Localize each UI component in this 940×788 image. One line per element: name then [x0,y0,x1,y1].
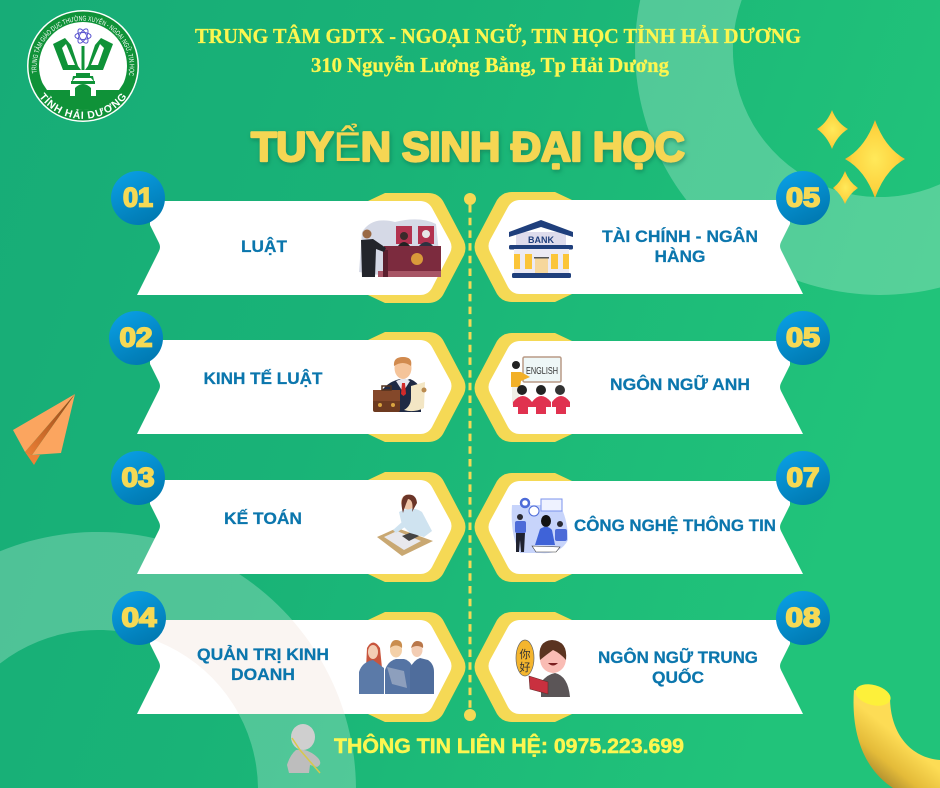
badge: 04 [112,591,166,645]
icon: bank [509,220,573,278]
label: NGÔN NGỮ TRUNG [598,647,758,667]
logo: TỈNH HẢI DƯƠNG [40,92,126,119]
badge: 08 [776,591,830,645]
panel: 08 Ngôn ngữ Trung Quốc [474,612,803,722]
label: CÔNG NGHỆ THÔNG TIN [574,516,776,535]
badge: 08: 08 [786,602,820,632]
icon: 3d yellow tube [853,681,940,788]
badge: 01: 01 [123,182,153,212]
icon: IT team [512,499,568,553]
decorative ring: bottom left [0,532,356,788]
label: KINH TẾ LUẬT [204,369,323,388]
panel: 05 Ngôn ngữ Anh [474,333,803,442]
badge: 04: 04 [122,602,157,632]
icon: chinese speaker [516,640,570,697]
badge: 05 second: 05 [786,322,820,352]
panel: 01 Luật [137,193,466,303]
icon: chinese speaker: 你 [520,646,530,662]
label: QUẢN TRỊ KINH [197,645,329,664]
panel: 02 Kinh tế luật [137,332,466,442]
label line 2: QUỐC [652,667,704,687]
icon: english class: ENGLISH [526,366,558,377]
badge: 03: 03 [122,462,154,492]
label: TÀI CHÍNH - NGÂN [602,227,758,246]
badge: 05 top: 05 [786,182,820,212]
badge: 02 [109,311,163,365]
logo: TRUNG TÂM GIÁO DỤC THƯỜNG XUYÊN - NGOẠI NGỮ, TIN HỌC [32,15,134,76]
icon: business team [359,640,434,694]
panel: 05 Tài chính - Ngân hàng [474,192,803,302]
badge: 01 [111,171,165,225]
panel: 07 Công nghệ thông tin [474,473,803,582]
title: TUYỂN SINH ĐẠI HỌC [251,122,685,170]
panel: 04 Quản trị kinh doanh [137,612,466,722]
icon: businessman with briefcase [373,357,426,412]
label line 2: HÀNG [654,247,706,266]
label: KẾ TOÁN [224,509,302,528]
icon: person on phone [287,724,320,773]
badge: 05 second [776,311,830,365]
badge: 03 [111,451,165,505]
icon: paper plane [13,394,75,465]
header: centre name: TRUNG TÂM GDTX - NGOẠI NGỮ, TIN HỌC TỈNH HẢI DƯƠNG [195,24,801,48]
icon: english class [511,357,570,414]
contact line: THÔNG TIN LIÊN HỆ: 0975.223.699 [334,734,684,758]
decorative ring: top right [635,0,940,295]
header: address: 310 Nguyễn Lương Bằng, Tp Hải Dương [311,53,669,77]
panel: 03 Kế toán [137,472,466,582]
label line 2: DOANH [231,665,295,684]
timeline dashed spine [464,193,476,721]
icon: courtroom [359,219,441,277]
badge: 05 top [776,171,830,225]
icon: chinese speaker: 好 [520,659,530,675]
label: LUẬT [241,237,288,256]
badge: 07 [776,451,830,505]
badge: 07: 07 [786,462,820,492]
icon: accountant [377,494,433,556]
logo [27,10,139,122]
badge: 02: 02 [120,322,152,352]
icon: bank: BANK [528,235,554,245]
icon: sparkles [817,110,905,204]
label: NGÔN NGỮ ANH [610,374,750,394]
